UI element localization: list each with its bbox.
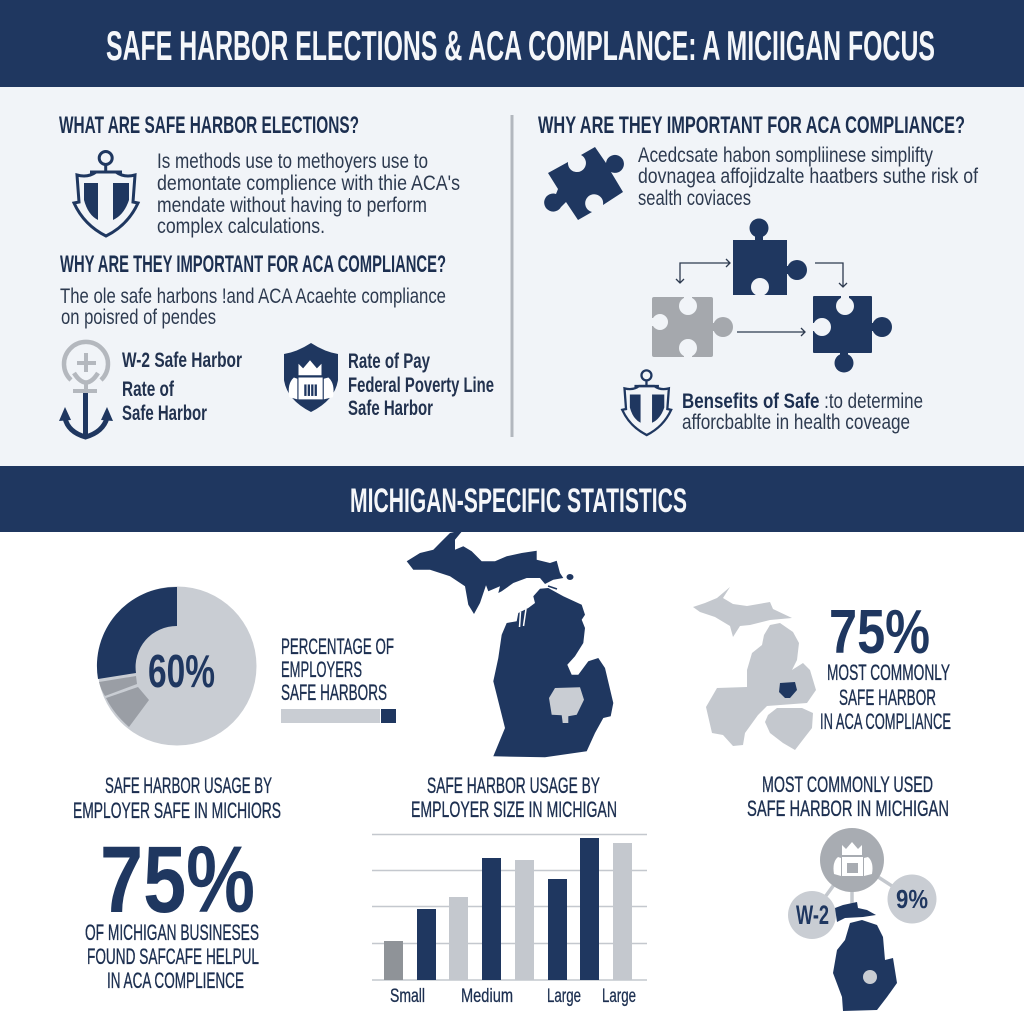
label: percentage of employers: EMPLOYERS (281, 657, 362, 682)
text: W-2 safe harbor (122, 349, 242, 425)
icon: gray puzzle piece (651, 296, 733, 358)
stat: 75% most commonly: 75% (829, 598, 930, 667)
section banner: Michigan statistics: MICHIGAN-SPECIFIC STATISTICS (350, 482, 687, 520)
section banner: Michigan statistics (0, 466, 1024, 532)
badge: W-2 (788, 891, 836, 939)
heading: most commonly used (747, 772, 949, 821)
text: safe harbors description (60, 285, 446, 329)
text: simplify: sealth coviaces (638, 187, 751, 210)
text: definition: demontate complience with thie ACA's (157, 172, 460, 195)
text: definition: Is methods use to methoyers use to (157, 150, 428, 173)
label: percentage of employers (281, 634, 396, 723)
text: definition (157, 150, 460, 238)
text: rate of pay: Rate of Pay (348, 350, 430, 373)
arrow: right loop (815, 263, 847, 287)
stat: 75% of Michigan businesses: SAFE HARBOR USAGE BY (105, 773, 272, 798)
stat: 75% of Michigan businesses: 75% (100, 827, 255, 933)
heading: bar chart: SAFE HARBOR USAGE BY (427, 773, 600, 798)
text: benefits: Bensefits of Safe :to determine (682, 390, 923, 413)
stat: 75% most commonly (820, 598, 951, 734)
bar chart: usage by employer size: Large (547, 986, 581, 1007)
text: W-2 safe harbor: Rate of (122, 378, 175, 401)
panel: what are safe harbor elections (59, 112, 494, 437)
stat: 75% most commonly: MOST COMMONLY (827, 660, 950, 685)
heading: most commonly used: MOST COMMONLY USED (762, 772, 933, 797)
text: rate of pay (348, 350, 494, 420)
text: rate of pay: Federal Poverty Line (348, 374, 494, 397)
arrow: middle (737, 328, 805, 336)
map: Michigan large (407, 530, 613, 757)
donut chart: 60%: 60% (148, 645, 215, 697)
map: Michigan gray with regions (693, 587, 816, 750)
icon: W-2 anchor medal (59, 342, 113, 437)
stat: 75% most commonly: SAFE HARBOR (839, 685, 936, 710)
bar chart: usage by employer size: Medium (461, 986, 513, 1007)
text: definition: complex calculations. (157, 215, 325, 238)
heading: bar chart (411, 773, 617, 822)
icon: tilted puzzle piece (544, 147, 624, 220)
label: percentage of employers: PERCENTAGE OF (281, 634, 394, 659)
badge: W-2: W-2 (796, 900, 829, 930)
text: benefits (682, 390, 923, 434)
text: definition: mendate without having to perform (157, 194, 427, 217)
map: Michigan small (833, 902, 897, 1011)
heading: bar chart: EMPLOYER SIZE IN MICHIGAN (411, 797, 617, 822)
bar chart: usage by employer size: Large (602, 986, 636, 1007)
text: simplify: Acedcsate habon sompliinese simplifty (638, 144, 933, 167)
stat: 75% of Michigan businesses: EMPLOYER SAFE IN MICHIORS (73, 798, 281, 823)
icon: anchor shield (74, 152, 138, 236)
text: safe harbors description: The ole safe harbons !and ACA Acaehte compliance (60, 285, 446, 308)
diagram: most used safe harbor with Michigan map (788, 828, 936, 1011)
title banner (0, 0, 1024, 87)
stat: 75% of Michigan businesses: OF MICHIGAN BUSINESES (85, 920, 259, 945)
stat: 75% of Michigan businesses: FOUND SAFCAFE HELPUL (87, 944, 259, 969)
text: benefits: afforcbablte in health coveage (682, 411, 910, 434)
stat: 75% of Michigan businesses (73, 773, 281, 993)
badge: 9%: 9% (896, 884, 928, 914)
icon: crest circle (820, 828, 884, 892)
icon: top puzzle piece (733, 218, 807, 296)
icon: small anchor shield (622, 370, 671, 435)
stat: 75% of Michigan businesses: IN ACA COMPLIENCE (107, 968, 244, 993)
text: W-2 safe harbor: W-2 Safe Harbor (122, 349, 242, 372)
heading: what are safe harbor elections: WHAT ARE SAFE HARBOR ELECTIONS? (59, 112, 359, 139)
icon: crest shield (284, 343, 338, 412)
text: W-2 safe harbor: Safe Harbor (122, 402, 207, 425)
text: simplify (638, 144, 978, 210)
label: percentage of employers: SAFE HARBORS (281, 680, 387, 705)
bar chart: usage by employer size: Small (390, 986, 425, 1007)
icon: right puzzle piece (812, 295, 892, 372)
heading: why important left: WHY ARE THEY IMPORTANT FOR ACA COMPLIANCE? (60, 251, 446, 278)
text: rate of pay: Safe Harbor (348, 397, 433, 420)
arrow: left loop (676, 259, 730, 283)
bar chart: usage by employer size (372, 773, 647, 1007)
donut chart: 60% (97, 586, 256, 746)
badge: 9% (888, 874, 936, 924)
diagram: puzzle pieces with arrows (651, 218, 892, 372)
text: safe harbors description: on poisred of pendes (61, 306, 216, 329)
panel: why important right (538, 112, 978, 435)
